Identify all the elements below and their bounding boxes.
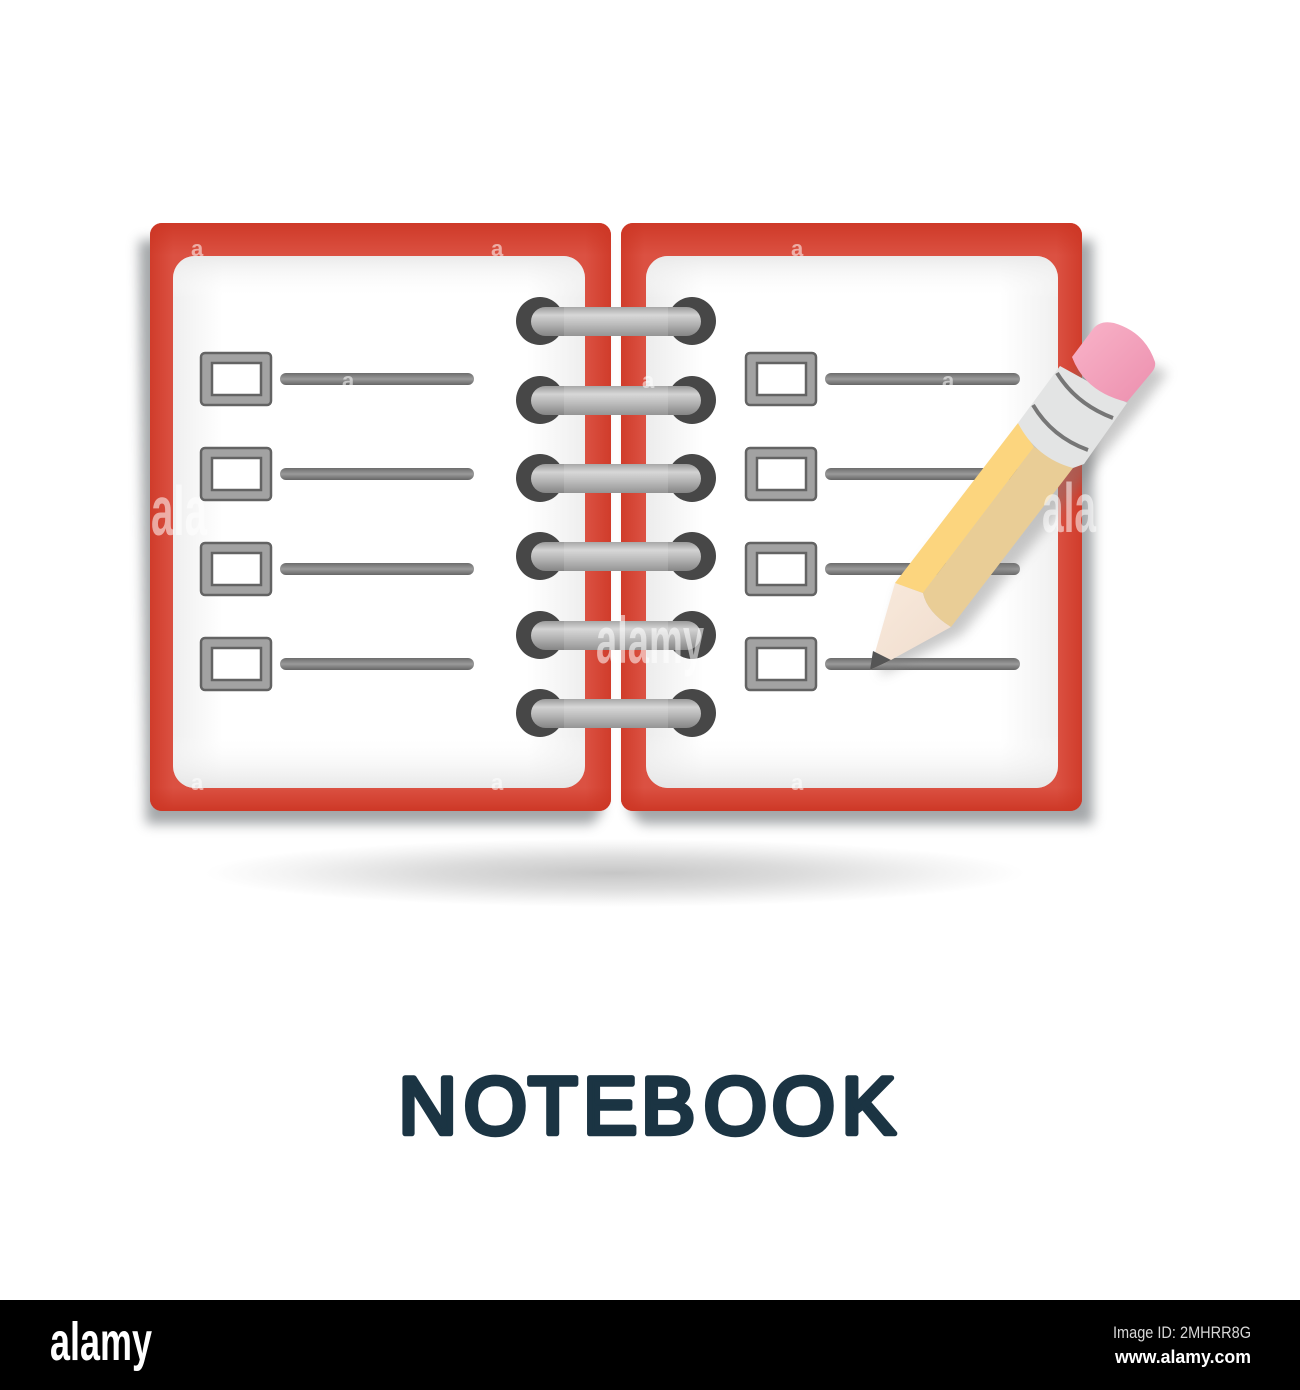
right cover <box>621 223 1082 811</box>
stock watermark fragments: a <box>491 770 504 795</box>
stock watermark fragments: a <box>342 368 355 393</box>
pencil <box>870 322 1168 676</box>
title: NOTEBOOK <box>398 1062 896 1152</box>
pencil body <box>895 423 1073 627</box>
footer bar <box>0 1300 1300 1390</box>
image id: Image ID: 2MHRR8G <box>1113 1323 1251 1342</box>
stock watermark fragments: a <box>642 368 655 393</box>
left cover <box>150 223 611 811</box>
stock watermark fragments: a <box>791 770 804 795</box>
stock watermark fragments: ala <box>151 472 208 550</box>
left checklist <box>201 353 474 690</box>
right checklist <box>746 353 1020 690</box>
website: www.alamy.com <box>1114 1346 1251 1367</box>
footer logo: alamy <box>50 1312 152 1372</box>
stock watermark fragments: a <box>191 236 204 261</box>
spiral binding <box>516 297 716 737</box>
stock watermark fragments: alamy <box>596 603 704 677</box>
stock watermark fragments: a <box>191 770 204 795</box>
notebook <box>139 223 1093 824</box>
pencil ferrule <box>1018 366 1127 468</box>
cover shadows <box>139 240 1093 824</box>
stock watermark fragments: a <box>791 236 804 261</box>
ground shadow <box>205 839 1025 907</box>
stock watermark fragments: a <box>942 368 955 393</box>
stock watermark fragments <box>151 236 1097 795</box>
stock watermark fragments: a <box>491 236 504 261</box>
stock watermark fragments: ala <box>1042 469 1097 547</box>
pencil shadow <box>880 345 1168 676</box>
pencil wood tip <box>870 583 951 670</box>
pencil lead <box>870 651 891 670</box>
pencil eraser <box>1072 322 1155 402</box>
